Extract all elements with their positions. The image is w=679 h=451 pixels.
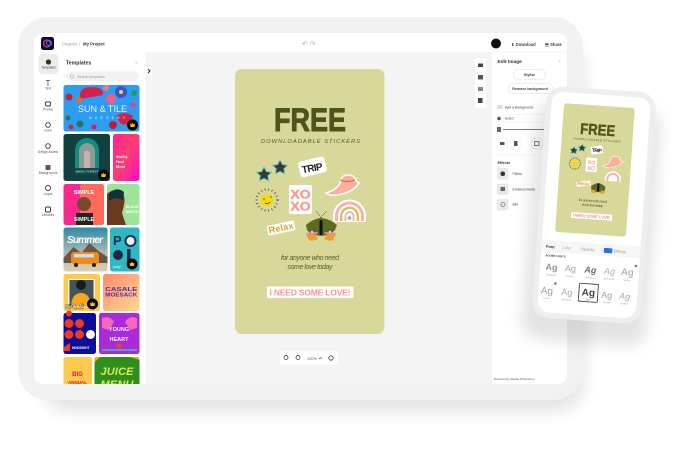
stylize button: Stylize <box>524 73 535 77</box>
phone poster: I NEED SOME LOVE! <box>573 213 611 220</box>
phone stickers: XO <box>587 166 596 173</box>
zoom toolbar: 100% <box>307 357 317 361</box>
sticker: moth <box>306 211 337 241</box>
effects section: Blur <box>512 202 519 206</box>
sticker: xo xo <box>289 185 312 214</box>
poster button: I NEED SOME LOVE! <box>270 288 351 298</box>
poster: free stickers: some love today <box>288 264 333 271</box>
phone font picker: Ag <box>545 262 558 273</box>
panel collapse arrow <box>145 66 152 76</box>
top bar: / <box>79 42 81 46</box>
phone stickers: Relax <box>577 181 590 187</box>
template: sun and tile: SUN & TILE <box>78 104 127 114</box>
phone poster: some love today <box>582 203 603 208</box>
template: pink gradient: Blend <box>116 165 125 169</box>
edit image panel <box>492 52 567 384</box>
template: pink portrait: SIMPLE <box>74 190 95 196</box>
templates panel: × <box>135 60 138 66</box>
remove background button <box>508 84 553 94</box>
effects section: Filters <box>512 172 522 176</box>
undo redo: ↶ ↷ <box>302 41 316 48</box>
sticker: hat <box>326 175 359 195</box>
app logo <box>41 37 54 50</box>
sticker: relax: Relax <box>268 221 294 235</box>
phone font picker: Cursive <box>566 275 575 278</box>
template: summer van <box>64 228 108 272</box>
poster heading: FREE <box>274 102 346 138</box>
phone poster: DOWNLOADABLE STICKERS <box>573 136 621 144</box>
icon rail: Logos <box>44 192 53 196</box>
panel title: Edit Image <box>498 59 522 65</box>
phone screen <box>537 91 651 319</box>
icon rail: Templates <box>41 66 56 70</box>
phone font picker: ADOBE FONTS <box>545 253 566 259</box>
template: teal arch: MAGIC FOREST <box>76 170 99 174</box>
search field <box>66 72 139 82</box>
powered by: Powered by Adobe Photoshop <box>494 377 535 381</box>
top bar <box>34 33 567 52</box>
sticker: xo xo: XO <box>290 200 310 214</box>
template: casale moesack <box>103 274 140 311</box>
tablet screen <box>34 33 567 391</box>
zoom toolbar <box>280 352 338 364</box>
sticker: trip <box>297 156 328 178</box>
sticker: sun <box>256 190 278 210</box>
icon rail: Design Assets <box>38 150 59 154</box>
template: pink portrait: SIMPLE <box>74 217 95 223</box>
remove background button: Remove background <box>512 87 548 91</box>
slider <box>497 127 545 132</box>
tablet body <box>18 17 583 400</box>
phone poster <box>555 103 635 237</box>
phone <box>531 85 657 325</box>
search field: Search templates <box>77 75 105 79</box>
panel heading: Templates <box>66 60 91 66</box>
template: pink gradient: Food <box>116 160 124 164</box>
add background <box>497 105 533 110</box>
icon rail: Libraries <box>42 213 55 217</box>
tablet shadow <box>40 40 585 412</box>
phone font picker: Nimbus <box>623 280 631 282</box>
template: juice menu: JUICE <box>100 366 134 378</box>
top bar: My Project <box>83 42 105 46</box>
template: teal arch <box>64 134 110 181</box>
phone tabs: Opacity <box>581 246 595 252</box>
phone tabs: Font <box>546 244 555 249</box>
template: young at heart <box>99 313 140 354</box>
templates panel <box>60 52 146 391</box>
phone font picker: Ag <box>601 290 613 300</box>
phone font picker: Myriad Alt <box>561 298 572 302</box>
phone shadow <box>521 101 662 347</box>
template: yellow sale <box>64 274 100 311</box>
template: pool party: party <box>112 265 121 269</box>
phone font picker: Ag <box>583 264 597 275</box>
download: ⬇ Download <box>511 42 536 47</box>
template: green portrait: MONTH <box>126 210 139 214</box>
phone font picker: Ag <box>618 291 631 302</box>
sticker: rainbow <box>333 200 366 222</box>
icon rail: Backgrounds <box>39 171 58 175</box>
phone body <box>531 85 657 325</box>
template: sun and tile <box>64 85 140 132</box>
template: casale moesack: MOESACK <box>105 292 138 298</box>
phone font picker: Open <box>585 299 591 302</box>
sticker: xo xo: XO <box>290 188 310 202</box>
template: juice menu: MENU <box>100 379 135 391</box>
effects section: Enhancements <box>512 188 535 192</box>
phone font picker: Ag <box>565 263 576 274</box>
phone font picker <box>540 253 638 306</box>
icon rail: Text <box>45 86 51 90</box>
icon rail <box>34 52 60 384</box>
template: pool party: P <box>113 233 122 248</box>
phone font picker: Ag <box>561 287 573 298</box>
phone tabs <box>541 239 641 258</box>
effects section <box>497 161 535 210</box>
phone font picker: Flowers <box>620 302 629 306</box>
template: casale moesack: CASALE <box>105 287 138 293</box>
phone poster: for anyone who need <box>579 198 608 204</box>
template: big annual sale: BIG <box>72 372 83 378</box>
phone poster: FREE <box>580 121 616 140</box>
add background: Add a Background <box>505 106 533 110</box>
template: big annual sale <box>64 357 92 385</box>
template: young at heart: YOUNG <box>109 327 129 333</box>
edit image panel: × <box>558 59 561 65</box>
phone stickers <box>567 143 624 195</box>
poster tagline: for anyone who need <box>281 255 340 262</box>
phone font picker: Futura <box>543 297 550 300</box>
sticker: trip: TRIP <box>301 162 324 176</box>
poster: free stickers: DOWNLOADABLE STICKERS <box>261 139 360 145</box>
effects section: Effects <box>498 161 510 165</box>
phone stickers: XO <box>587 160 596 167</box>
phone font picker: Ag <box>603 266 615 277</box>
share: ⬒ Share <box>545 42 562 47</box>
template: yellow sale: SALE <box>65 304 84 311</box>
phone font picker: Helvetica <box>585 276 595 280</box>
phone font picker: Ag <box>581 287 595 299</box>
phone font picker: Ag <box>621 267 634 279</box>
phone font picker: Ag <box>540 286 553 297</box>
template: blue dots <box>64 310 96 354</box>
phone font picker: Oswald Alt <box>546 273 557 277</box>
select field <box>497 114 548 122</box>
template: green portrait: BLACK <box>126 205 139 209</box>
icon rail: Photos <box>43 108 53 112</box>
poster: free stickers <box>235 69 384 334</box>
template: summer van: Summer <box>67 235 104 246</box>
template: pink gradient <box>113 134 140 181</box>
template: sun and tile: NURSERY <box>89 116 126 120</box>
breadcrumb: Projects <box>62 42 78 46</box>
phone font picker: Serif Script <box>603 277 615 281</box>
avatar <box>491 38 501 48</box>
phone font picker: Roboto <box>603 301 611 304</box>
template: pink gradient: Healthy <box>116 155 128 159</box>
icon rail: Icons <box>44 128 52 132</box>
sticker: stars <box>257 160 288 181</box>
template: green portrait <box>107 184 140 225</box>
icon rail: T <box>46 79 51 88</box>
select field: Select <box>505 116 514 120</box>
template: juice menu <box>94 357 140 384</box>
phone tabs: Effects <box>614 249 626 254</box>
template: blue dots: HINDSIGHT <box>72 346 90 350</box>
template: young at heart: HEART <box>110 337 129 343</box>
template: big annual sale: ANNUAL <box>68 380 87 385</box>
template: pink portrait <box>64 184 104 225</box>
phone stickers: TRIP <box>592 148 603 154</box>
transform buttons <box>497 138 543 149</box>
floating tool strip <box>475 58 486 108</box>
stylize button <box>514 70 546 80</box>
phone tabs: Color <box>562 245 572 251</box>
template: pool party <box>110 228 140 272</box>
